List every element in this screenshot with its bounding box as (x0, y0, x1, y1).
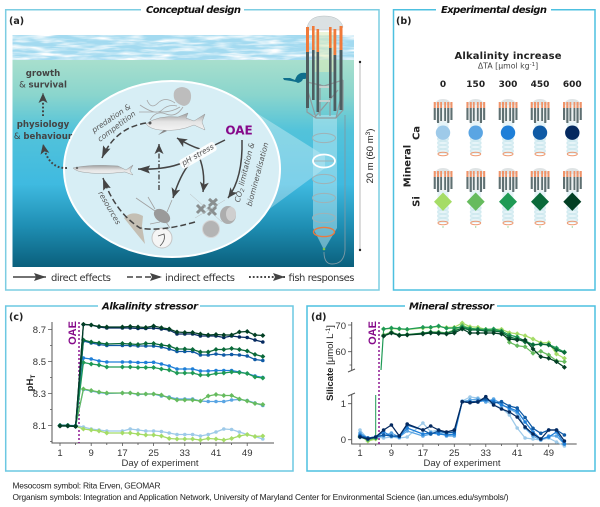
axis title: pH: T (30, 375, 37, 379)
subheading: delta TA units: ] (535, 62, 538, 70)
axes d: 60 (335, 347, 346, 358)
heading: alkalinity stressor: Alkalinity stressor (101, 302, 199, 312)
icon: dinoflagellate (220, 206, 236, 224)
alkalinity levels: 300 (499, 80, 517, 90)
heading: conceptual design: Conceptual design (146, 5, 241, 16)
sea background (12, 35, 354, 267)
label: mesocosm size: ) (365, 129, 376, 132)
axis title: pH: pH (25, 379, 36, 391)
panel: conceptual design (6, 5, 379, 290)
axes d: 1 (341, 399, 346, 410)
credit: organism symbols: Organism symbols: Integration and Application Network, University of Maryland Center for Environmental Science (ian.umces.edu/symbols/) (12, 492, 509, 502)
panel: experimental design (394, 5, 595, 290)
line chart: silicate lower series (360, 395, 564, 446)
axes c: 1 (57, 448, 63, 459)
icon: diatoms (190, 194, 225, 222)
line chart: pH series (60, 324, 263, 440)
alkalinity levels: 450 (531, 80, 549, 90)
arrow: pH stress to phytoplankton (197, 152, 204, 192)
label: Si: Si (412, 196, 422, 207)
marker: OAE d: OAE (367, 321, 379, 345)
icon: large fish (146, 113, 205, 135)
panel: alkalinity stressor (6, 302, 293, 471)
arrow: pH stress to large fish (177, 138, 200, 149)
marker: OAE d (367, 321, 379, 444)
arrow: pH stress to zooplankton (173, 163, 190, 198)
arrow: resources dashed (103, 178, 195, 229)
axes c: 8.1 (33, 421, 46, 432)
heading: alkalinity increase: Alkalinity increase (454, 51, 562, 62)
axes d: 1 (357, 448, 363, 459)
text: growth and survival: & survival (19, 80, 67, 90)
alkalinity levels: 0 (440, 80, 446, 90)
axis title: day of experiment d: Day of experiment (423, 458, 501, 469)
icon: small fish (73, 165, 133, 175)
label: OAE: OAE (225, 124, 253, 138)
scale bar (359, 61, 361, 251)
panel: mineral stressor (307, 302, 595, 471)
arrow: OAE to small fish (138, 140, 225, 169)
subheading: delta TA units: ΔTA [μmol kg (478, 62, 530, 70)
label: CO2 limitation and biomineralisation: biomineralisation (245, 141, 270, 207)
legend: direct effects: direct effects (51, 273, 111, 284)
mesocosm row: Si (434, 168, 582, 228)
process bubble (64, 81, 280, 257)
axis title: silicate: ] (325, 325, 336, 328)
label: CO2 limitation and biomineralisation: 2 (240, 187, 247, 193)
axes c: 25 (148, 448, 159, 459)
text: growth and survival: growth (26, 69, 60, 79)
line chart: silicate upper series (381, 323, 564, 370)
icon: jellyfish (139, 87, 191, 120)
axes d: 0 (341, 435, 346, 446)
icon: sphere plankton (152, 228, 172, 248)
panel label a: (a) (9, 16, 24, 27)
text: physiology and behaviour: physiology (17, 120, 70, 130)
arrow: fish to physiology (43, 144, 67, 168)
label: CO2 limitation and biomineralisation (233, 141, 270, 207)
label: Ca: Ca (412, 126, 422, 140)
axis title: day of experiment c: Day of experiment (121, 458, 199, 469)
axes d: 49 (543, 448, 554, 459)
arrow: predation dashed (102, 123, 146, 158)
label: resources: resources (96, 190, 123, 226)
icon: pteropod (124, 213, 145, 244)
arrow: CO2 limitation (228, 140, 242, 198)
icon: diver (283, 73, 309, 83)
axes d: 41 (512, 448, 522, 459)
axes d: 25 (449, 448, 460, 459)
legend: fish responses (249, 273, 354, 284)
mesocosm row: Ca (434, 99, 582, 156)
icon: coccolithophore (202, 220, 220, 238)
legend (13, 273, 354, 284)
panel label b: (b) (396, 16, 411, 27)
heading: mineral stressor: Mineral stressor (409, 302, 495, 312)
legend: direct effects (13, 273, 111, 284)
axes c: 8.7 (33, 325, 46, 336)
legend: indirect effects (127, 273, 235, 284)
axes c: 33 (180, 448, 190, 459)
axes c: 49 (242, 448, 252, 459)
axes c: 9 (89, 448, 94, 459)
icon: copepod (136, 197, 173, 228)
text: growth and survival (19, 69, 67, 90)
label: mesocosm size: 3 (365, 131, 372, 135)
alkalinity levels: 150 (466, 80, 485, 90)
axes d: 17 (418, 448, 428, 459)
label: CO2 limitation and biomineralisation: CO (233, 190, 244, 203)
axis title: silicate: -1 (325, 327, 332, 334)
marker: OAE c: OAE (67, 321, 79, 345)
axes c (33, 322, 274, 459)
text: physiology and behaviour: & behaviour (14, 132, 73, 142)
label: predation and competition: competition (96, 109, 138, 144)
marker: OAE c (67, 321, 79, 443)
credit: mesocosm symbol: Mesocosm symbol: Rita Erven, GEOMAR (12, 480, 160, 490)
axis label: mineral: Mineral (402, 145, 414, 187)
label: predation and competition: predation & (89, 102, 132, 135)
panel label d: (d) (311, 312, 326, 323)
label: pH stress: pH stress (179, 142, 215, 168)
label: CO2 limitation and biomineralisation: limitation & (236, 141, 256, 189)
axes c: 17 (117, 448, 128, 459)
subheading: delta TA units: -1 (530, 62, 535, 68)
axes c: 8.5 (33, 357, 46, 368)
mesocosm (306, 16, 345, 264)
arrow: dash-dot vertical (158, 144, 160, 190)
text: physiology and behaviour (14, 120, 73, 142)
label: mesocosm size: 20 m (60 m (365, 135, 376, 183)
axes d: 9 (389, 448, 394, 459)
zoom light cone (255, 112, 325, 210)
axis title: silicate: Silicate [μmol L (325, 334, 336, 401)
heading: experimental design: Experimental design (441, 5, 547, 16)
alkalinity levels (440, 80, 582, 90)
alkalinity levels: 600 (563, 80, 582, 90)
arrow: physiology to growth (42, 93, 44, 116)
axes d: 70 (335, 321, 346, 332)
panel label c: (c) (9, 312, 23, 323)
axes d: 33 (481, 448, 491, 459)
axes c: 8.3 (33, 389, 46, 400)
axes d (335, 321, 577, 459)
axes c: 41 (211, 448, 221, 459)
credits (12, 480, 509, 502)
legend: fish responses: fish responses (288, 273, 354, 284)
legend: indirect effects: indirect effects (165, 273, 235, 284)
